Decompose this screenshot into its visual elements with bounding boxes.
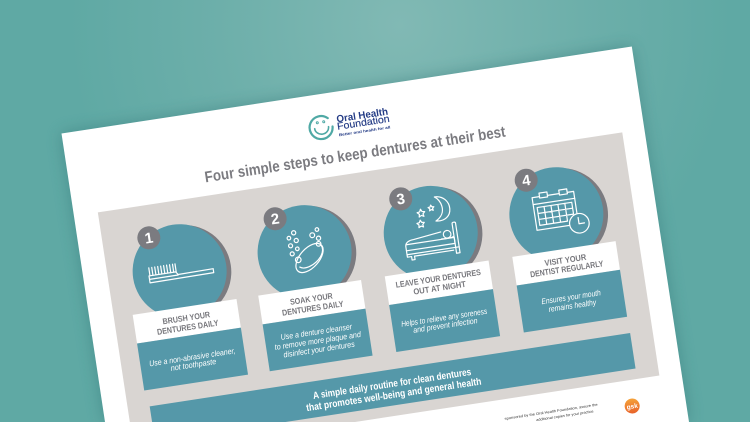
description box: not toothpaste xyxy=(170,357,217,373)
step 1: brush xyxy=(120,215,248,390)
circle with shadow xyxy=(126,217,238,326)
icon: denture with bubbles xyxy=(286,226,332,279)
description box: Use a denture cleanser xyxy=(280,322,353,342)
description box xyxy=(389,289,500,352)
title: Four simple steps to keep dentures at their best xyxy=(204,124,507,186)
circle with shadow xyxy=(503,160,615,269)
heading box xyxy=(512,241,620,286)
number badge xyxy=(262,206,288,232)
step 4: dentist visit xyxy=(499,157,627,333)
banner: that promotes well-being and general health xyxy=(306,377,482,414)
description box: to remove more plaque and xyxy=(274,330,362,352)
heading box: LEAVE YOUR DENTURES xyxy=(395,267,482,290)
panel: grey background xyxy=(98,132,659,422)
description box: remains healthy xyxy=(548,298,598,314)
heading box: DENTURES DAILY xyxy=(156,318,219,337)
heading box: DENTIST REGULARLY xyxy=(529,258,604,279)
banner: A simple daily routine for clean dentures xyxy=(312,367,472,402)
description box: Use a non-abrasive cleaner, xyxy=(149,346,236,368)
logo: Oral Health Foundation xyxy=(308,106,391,141)
icon: calendar and clock xyxy=(532,186,591,239)
icon: smiling face xyxy=(308,114,334,141)
heading box: SOAK YOUR xyxy=(289,291,333,307)
step 3: night xyxy=(372,176,500,352)
number badge xyxy=(513,167,539,193)
number badge: 3 xyxy=(395,191,406,209)
icon: toothbrush xyxy=(148,258,214,283)
logo: Oral Health Foundation: Foundation xyxy=(336,114,390,133)
description box xyxy=(137,328,248,390)
banner xyxy=(150,333,636,422)
description box xyxy=(517,270,627,333)
number badge: 2 xyxy=(270,210,281,228)
heading box: DENTURES DAILY xyxy=(281,298,344,318)
logo tagline: Better oral health for all xyxy=(339,125,391,137)
heading box: VISIT YOUR xyxy=(544,252,587,268)
heading box: OUT AT NIGHT xyxy=(413,279,467,297)
heading box: BRUSH YOUR xyxy=(162,309,211,326)
logo: gsk: gsk xyxy=(626,403,639,411)
logo name: Oral Health xyxy=(336,107,389,125)
logo: gsk xyxy=(624,397,641,415)
number badge xyxy=(136,225,162,251)
tilted document xyxy=(89,71,664,422)
number badge xyxy=(388,186,414,212)
step 2: soak xyxy=(245,196,373,371)
description box xyxy=(263,309,373,371)
description box: and prevent infection xyxy=(413,316,479,335)
page shadow xyxy=(62,46,689,422)
heading box xyxy=(385,261,493,305)
number badge: 4 xyxy=(521,172,532,190)
number badge: 1 xyxy=(144,229,154,248)
heading box xyxy=(258,280,365,324)
description box: Helps to relieve any soreness xyxy=(401,307,488,329)
page xyxy=(62,46,689,422)
circle with shadow xyxy=(377,179,489,288)
description box: disinfect your dentures xyxy=(283,340,355,359)
description box: Ensures your mouth xyxy=(541,288,602,306)
footer note: sponsored by the Oral Health Foundation, assure the xyxy=(504,403,598,421)
heading box xyxy=(133,299,241,344)
circle with shadow xyxy=(251,198,363,307)
footer note: additional copies for your practice xyxy=(536,409,594,422)
icon: bed, moon and stars xyxy=(399,194,460,261)
